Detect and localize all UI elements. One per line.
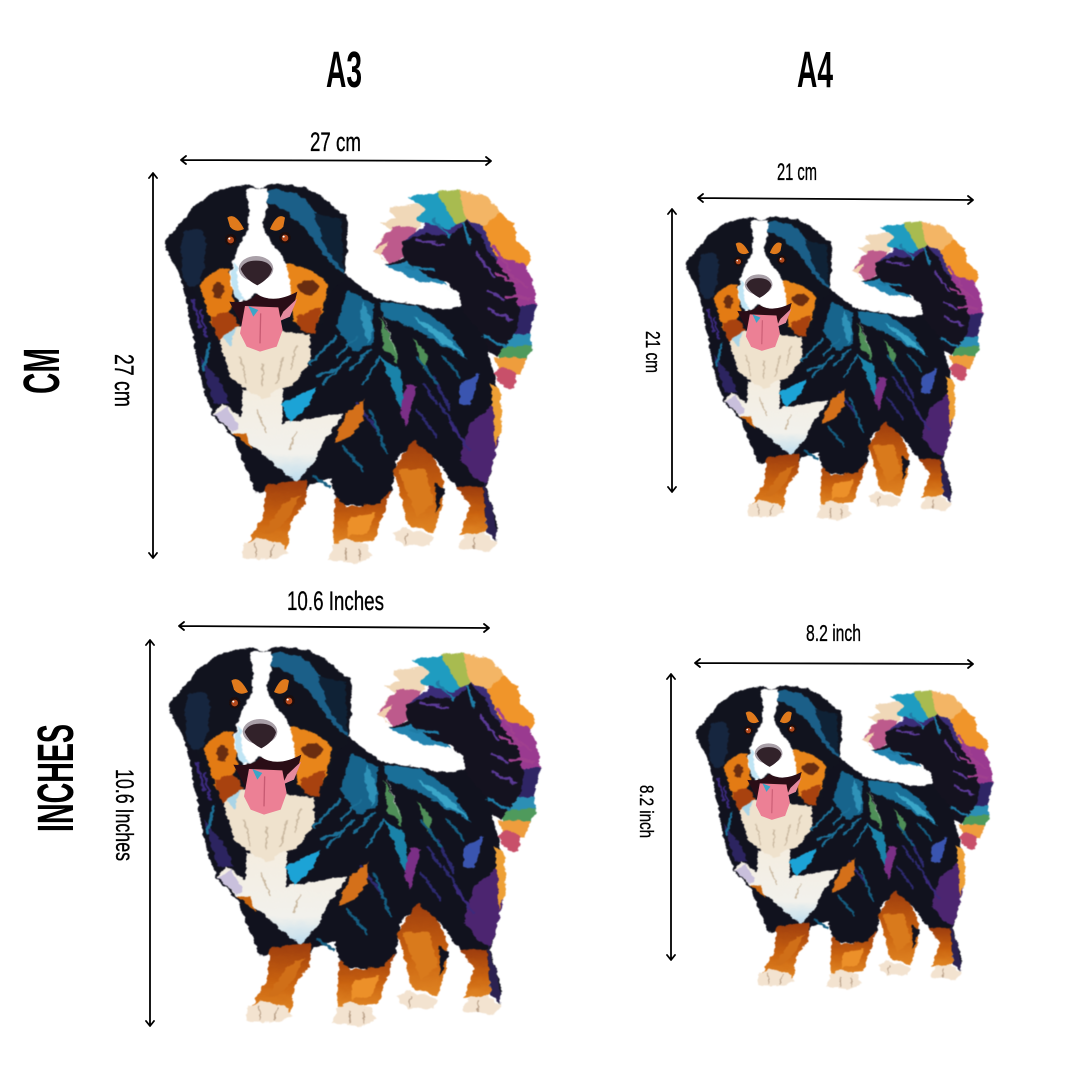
dog illustration: A3 in cm: [164, 184, 537, 563]
dog head base: [164, 184, 348, 340]
A3 cm width arrow: [181, 156, 491, 165]
tongue: [240, 306, 283, 352]
row heading: INCHES: INCHES: [27, 724, 84, 832]
dog legs and paws: [240, 439, 497, 563]
eyes: [225, 232, 291, 245]
A4 cm width label: 21 cm: [777, 159, 817, 186]
dog illustration: A3 in inches: [168, 647, 541, 1026]
A3 inches height label: 10.6 Inches: [110, 769, 138, 861]
row heading: CM: CM: [13, 348, 70, 394]
dog fur: tail, body, legs, chest and head base: [164, 184, 537, 563]
eyebrows: [227, 216, 285, 231]
A3 cm width label: 27 cm: [310, 127, 361, 157]
dog white chest: [213, 323, 363, 482]
mouth: [229, 292, 297, 327]
A4 inches height arrow: [667, 674, 675, 960]
A3 cm height label: 27 cm: [109, 354, 139, 407]
A3 inches width arrow: [179, 622, 489, 632]
A4 cm height label: 21 cm: [641, 331, 663, 373]
dog body: [182, 270, 502, 543]
A4 inches width arrow: [695, 659, 973, 668]
column heading: A3: A3: [326, 41, 362, 98]
dog illustration: A4 in cm: [685, 217, 984, 520]
dog illustration: A4 in inches: [695, 686, 994, 989]
nose: [239, 256, 273, 285]
A4 cm height arrow: [668, 209, 676, 492]
column heading: A4: A4: [797, 41, 833, 98]
dog face features: [225, 216, 297, 352]
A4 inches height label: 8.2 inch: [635, 785, 656, 838]
A3 inches height arrow: [146, 640, 154, 1026]
dog tail: [373, 189, 537, 388]
A3 inches width label: 10.6 Inches: [287, 586, 384, 616]
A4 inches width label: 8.2 inch: [806, 620, 861, 646]
A3 cm height arrow: [149, 173, 157, 558]
A4 cm width arrow: [698, 194, 973, 204]
